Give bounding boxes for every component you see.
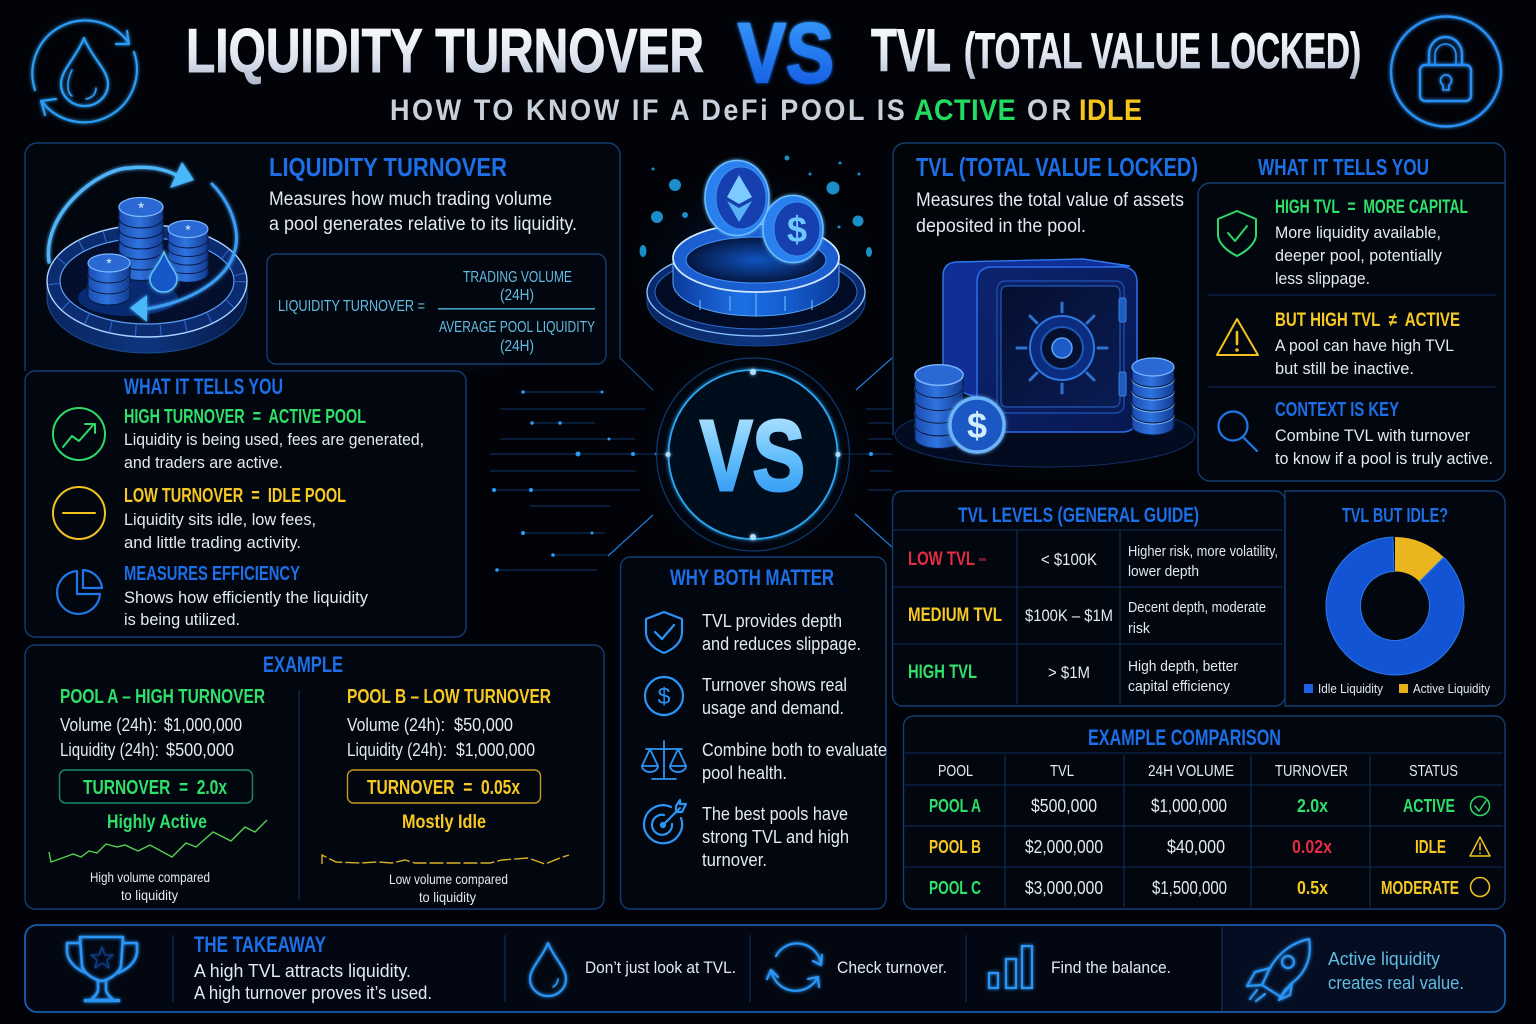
legend: Idle Liquidity [1318,681,1383,696]
vs connector lines [490,358,892,570]
illustration: vault with coins [895,259,1195,467]
inner panel: what it tells you (TVL): HIGH TVL = MORE CAPITAL [1275,197,1468,218]
panel: liquidity turnover: Measures how much trading volume [269,189,552,210]
particles [640,156,872,257]
panel: what it tells you (turnover): and little trading activity. [124,533,301,552]
panel: TVL but idle: TVL BUT IDLE? [1342,505,1448,527]
pool B: TURNOVER = 0.05x [367,777,520,799]
inner panel: what it tells you (TVL): CONTEXT IS KEY [1275,399,1399,421]
formula box [267,254,606,364]
panel: TVL levels: TVL LEVELS (GENERAL GUIDE) [958,504,1199,527]
row: pool C [929,878,1490,898]
panel: example comparison [904,716,1505,909]
title: LIQUIDITY TURNOVER [186,17,704,86]
panel: what it tells you (turnover): Liquidity is being used, fees are generated, [124,430,424,449]
panel: what it tells you (turnover): Shows how efficiently the liquidity [124,588,368,607]
pool A: Liquidity (24h): [60,740,159,760]
row: low TVL: < $100K [1041,550,1098,569]
table header: POOL [938,763,973,780]
row: low TVL: LOW TVL [908,549,975,570]
subtitle: IDLE [1079,94,1142,127]
panel: the takeaway: A high turnover proves it’s used. [194,983,432,1003]
icon: cycle arrows [767,943,822,991]
table header: STATUS [1409,763,1458,780]
panel: the takeaway [25,925,1505,1012]
formula box: (24H) [500,338,534,355]
panel: why both matter: TVL provides depth [702,611,842,631]
inner panel: what it tells you (TVL): BUT HIGH TVL ≠ ACTIVE [1275,310,1460,331]
panel: what it tells you (turnover): LOW TURNOVER = IDLE POOL [124,485,346,507]
icon: trend up [53,408,105,460]
subtitle: OR [1027,94,1071,127]
icon: trophy [67,937,137,1001]
row: pool B [929,837,1490,857]
legend: Active Liquidity [1413,681,1490,696]
row: pool B: $40,000 [1167,837,1225,857]
pool B: Low volume compared [389,871,508,887]
illustration: coin stacks and cycle arrows: * [138,200,144,217]
illustration: coin stacks and cycle arrows: * [185,223,191,239]
panel: TVL but idle [1285,491,1505,706]
inner panel: what it tells you (TVL): A pool can have high TVL [1275,336,1454,355]
formula box: AVERAGE POOL LIQUIDITY [439,319,595,336]
icon: dollar [645,677,683,715]
panel: the takeaway: Check turnover. [837,958,947,977]
panel: what it tells you (turnover): and traders are active. [124,453,283,472]
panel: why both matter: WHY BOTH MATTER [670,565,834,590]
panel: what it tells you (turnover) [25,371,466,637]
formula box: TRADING VOLUME [463,269,572,286]
pool A: TURNOVER = 2.0x [83,777,227,799]
vs connector nodes [492,390,873,572]
legend [1304,681,1490,696]
panel: TVL: deposited in the pool. [916,216,1086,237]
row: low TVL: Higher risk, more volatility, [1128,543,1278,560]
row: medium TVL [908,599,1266,637]
row: medium TVL: risk [1128,620,1150,637]
table header: 24H VOLUME [1148,763,1234,780]
panel: why both matter: strong TVL and high [702,827,849,847]
panel: the takeaway: THE TAKEAWAY [194,932,326,957]
icon: magnifier [1218,412,1257,451]
row: pool B: $2,000,000 [1025,837,1103,857]
row: pool C: 0.5x [1297,878,1328,898]
inner panel: what it tells you (TVL) [1198,183,1505,481]
inner panel: what it tells you (TVL): to know if a pool is truly active. [1275,449,1493,468]
table header: TVL [1050,763,1074,780]
panel: the takeaway: Find the balance. [1051,958,1171,977]
panel: what it tells you (turnover): HIGH TURNOVER = ACTIVE POOL [124,406,366,428]
panel: TVL levels [892,491,1285,706]
row: medium TVL: $100K – $1M [1025,606,1113,625]
panel: the takeaway: Don’t just look at TVL. [585,958,736,977]
subtitle [390,94,1142,127]
panel: what it tells you (turnover): MEASURES EFFICIENCY [124,563,300,585]
panel: TVL: Measures the total value of assets [916,190,1184,211]
title: VS [738,6,834,100]
icon: padlock [1391,16,1501,126]
pool B: to liquidity [419,889,476,905]
table header [938,763,1458,780]
panel: what it tells you (turnover): is being utilized. [124,610,240,629]
icon: bar chart [989,946,1032,988]
panel: example [25,645,604,909]
title [186,6,1361,100]
inner panel: what it tells you (TVL): less slippage. [1275,269,1370,288]
panel: example comparison: EXAMPLE COMPARISON [1088,725,1281,750]
panel: why both matter: Combine both to evaluate [702,740,887,760]
inner panel: what it tells you (TVL): Combine TVL with turnover [1275,426,1470,445]
illustration: vault with coins: $ [967,405,987,446]
panel: TVL: TVL (TOTAL VALUE LOCKED) [916,152,1198,182]
icon: target [644,800,686,843]
panel: what it tells you (turnover): WHAT IT TELLS YOU [124,374,283,399]
panel: TVL: WHAT IT TELLS YOU [1258,154,1429,180]
panel: what it tells you (turnover): Liquidity sits idle, low fees, [124,510,316,529]
pool B: Mostly Idle [402,812,486,833]
VS badge: VS [700,400,805,512]
row: pool C: MODERATE [1381,878,1459,898]
row: pool B: POOL B [929,837,981,857]
panel: why both matter [620,557,887,909]
row: high TVL: capital efficiency [1128,678,1230,695]
panel: why both matter: and reduces slippage. [702,634,861,654]
row: high TVL: High depth, better [1128,658,1238,675]
inner panel: what it tells you (TVL): but still be inactive. [1275,359,1414,378]
pool A: POOL A – HIGH TURNOVER [60,686,265,708]
icon: rocket [1247,939,1310,1001]
illustration: coin stacks and cycle arrows: * [106,255,112,271]
row: pool A: ACTIVE [1403,796,1455,816]
donut chart [1326,537,1464,675]
formula box: (24H) [500,287,534,304]
subtitle: HOW TO KNOW IF A DeFi POOL IS [390,94,905,127]
row: pool C: $3,000,000 [1025,878,1103,898]
row: pool A: 2.0x [1297,796,1328,816]
pool A: Highly Active [107,812,207,833]
panel: liquidity turnover: LIQUIDITY TURNOVER [269,152,507,182]
panel: TVL [893,143,1505,481]
panel: why both matter: turnover. [702,850,767,870]
subtitle: ACTIVE [914,94,1016,127]
pool A: to liquidity [121,887,178,903]
row: pool B: IDLE [1415,837,1446,857]
row: pool C: POOL C [929,878,981,898]
pool B: Volume (24h): [347,715,445,735]
icon: shield [646,612,682,653]
row: pool A: POOL A [929,796,981,816]
pool B: $1,000,000 [456,740,535,760]
panel: why both matter: pool health. [702,763,787,783]
row: high TVL: > $1M [1048,663,1090,682]
row: pool A: $1,000,000 [1151,796,1227,816]
panel: liquidity turnover: a pool generates relative to its liquidity. [269,214,577,235]
icon: drop [530,943,566,996]
panel: the takeaway: Active liquidity [1328,949,1440,969]
panel: liquidity turnover [25,143,653,390]
formula box: LIQUIDITY TURNOVER = [278,298,425,315]
icon: idle dash [53,487,105,539]
panel: why both matter: usage and demand. [702,698,844,718]
icon: pie chart [57,570,102,614]
row: medium TVL: Decent depth, moderate [1128,599,1266,616]
pool B: POOL B – LOW TURNOVER [347,686,551,708]
row: low TVL: lower depth [1128,563,1199,580]
row: pool C: $1,500,000 [1152,878,1227,898]
icon: green shield [1218,211,1256,256]
pool A: Volume (24h): [60,715,157,735]
panel: the takeaway: A high TVL attracts liquidity. [194,961,411,981]
pool B [322,686,569,905]
row: medium TVL: MEDIUM TVL [908,605,1002,626]
row: pool A [929,796,1490,816]
inner panel: what it tells you (TVL): deeper pool, potentially [1275,246,1442,265]
row: high TVL [908,658,1238,695]
row: pool B: 0.02x [1292,837,1332,857]
panel: why both matter: The best pools have [702,804,848,824]
pool A: $1,000,000 [164,715,242,735]
illustration: center platform with coins [622,156,882,360]
title: TVL [871,17,951,84]
illustration: center platform with coins: $ [787,209,807,250]
illustration: coin stacks and cycle arrows [29,162,265,359]
pool A: $500,000 [166,740,234,760]
VS badge [641,342,865,566]
icon: liquidity cycle [32,20,137,122]
row: low TVL [908,543,1278,580]
pool A: High volume compared [90,869,210,885]
icon: warning triangle [1217,319,1258,355]
pool B: $50,000 [454,715,513,735]
row: pool A: $500,000 [1031,796,1097,816]
table header: TURNOVER [1275,763,1348,780]
pool B: Liquidity (24h): [347,740,447,760]
icon: scales [642,741,686,779]
icon: dollar: $ [658,683,671,709]
panel: why both matter: Turnover shows real [702,675,847,695]
pool A [49,686,267,903]
panel: example: EXAMPLE [263,652,343,677]
inner panel: what it tells you (TVL): More liquidity available, [1275,223,1441,242]
panel: the takeaway: creates real value. [1328,973,1464,993]
row: high TVL: HIGH TVL [908,662,977,683]
